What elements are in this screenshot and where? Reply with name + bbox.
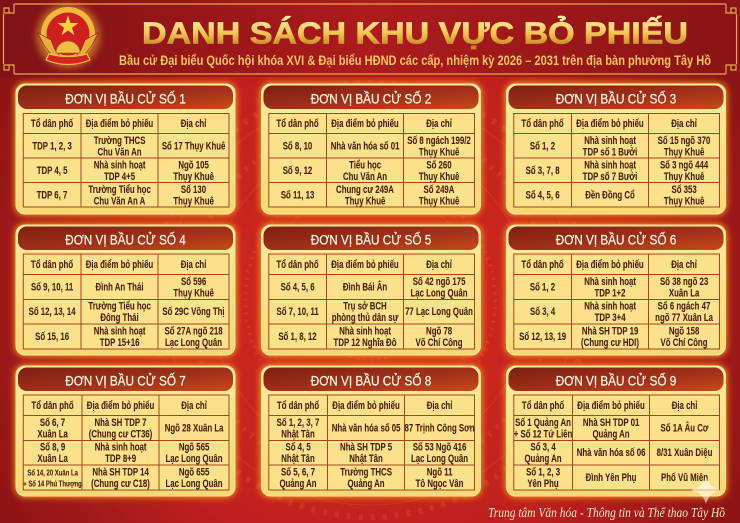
panel: đơn vị bầu cử số 1: TDP 4, 5: [37, 165, 68, 177]
panel: đơn vị bầu cử số 3: Số 3, 7, 8: [526, 165, 560, 177]
panel: đơn vị bầu cử số 9: [506, 365, 726, 497]
panel: đơn vị bầu cử số 2: Số 11, 13: [281, 189, 315, 202]
panel: đơn vị bầu cử số 9: Địa điểm bỏ phiếu: [577, 400, 645, 412]
panel: đơn vị bầu cử số 3: Thụy Khuê: [664, 171, 705, 183]
panel: đơn vị bầu cử số 7: Lạc Long Quân: [166, 453, 223, 465]
panel: đơn vị bầu cử số 1: Tổ dân phố: [31, 118, 73, 130]
panel: đơn vị bầu cử số 8: Quảng An: [279, 478, 317, 490]
icon: watermark sparkle: [691, 476, 721, 504]
panel: đơn vị bầu cử số 1: Chu Văn An: [97, 146, 142, 159]
panel: đơn vị bầu cử số 7: [15, 365, 236, 497]
panel: đơn vị bầu cử số 6: TDP 1+2: [595, 287, 625, 300]
panel: đơn vị bầu cử số 9: Số 1A Âu Cơ: [661, 421, 709, 435]
panel: đơn vị bầu cử số 6: Nhà sinh hoạt: [584, 300, 637, 313]
panel: đơn vị bầu cử số 7: Địa chỉ: [181, 400, 207, 412]
panel: đơn vị bầu cử số 7: Ngõ 28 Xuân La: [165, 422, 224, 435]
panel: đơn vị bầu cử số 5: Nhà sinh hoạt: [339, 325, 392, 338]
panel: đơn vị bầu cử số 4: Đông Thái: [100, 312, 139, 324]
panel: đơn vị bầu cử số 7: Số 6, 7: [40, 417, 65, 429]
panel: đơn vị bầu cử số 8: Nhà SH TDP 5: [340, 441, 393, 454]
panel: đơn vị bầu cử số 4: Số 15, 16: [35, 331, 70, 343]
panel: đơn vị bầu cử số 3: Thụy Khuê: [664, 146, 705, 159]
title: DANH SÁCH KHU VỰC BỎ PHIẾU: [142, 14, 688, 50]
panel: đơn vị bầu cử số 1: Địa chỉ: [181, 118, 207, 130]
panel: đơn vị bầu cử số 1: Địa điểm bỏ phiếu: [86, 118, 153, 130]
panel: đơn vị bầu cử số 3: Số 1, 2: [530, 140, 555, 153]
panel: đơn vị bầu cử số 6: Địa điểm bỏ phiếu: [576, 259, 644, 271]
panel: đơn vị bầu cử số 6: (Chung cư HDI): [581, 337, 639, 349]
panel: đơn vị bầu cử số 5: Đình Bái Ân: [343, 280, 387, 294]
decorative frame with corner frets: [4, 4, 736, 74]
panel: đơn vị bầu cử số 7: Ngõ 565: [179, 441, 210, 454]
panel: đơn vị bầu cử số 1: Thụy Khuê: [173, 171, 214, 183]
panel: đơn vị bầu cử số 3: Số 15 ngõ 370: [658, 135, 710, 147]
panel: đơn vị bầu cử số 2: Số 249A: [424, 184, 454, 196]
panel: đơn vị bầu cử số 7: Tổ dân phố: [31, 400, 74, 412]
panel: đơn vị bầu cử số 5: Số 7, 10, 11: [276, 306, 319, 318]
panel: đơn vị bầu cử số 2: Số 8 ngách 199/2: [407, 135, 471, 147]
panel: đơn vị bầu cử số 9: Phố Vũ Miên: [661, 472, 708, 484]
panel: đơn vị bầu cử số 3: Địa chỉ: [671, 118, 697, 130]
panel: đơn vị bầu cử số 1: Ngõ 105: [178, 159, 209, 172]
panel: đơn vị bầu cử số 4: ĐƠN VỊ BẦU CỬ SỐ 4: [65, 232, 186, 248]
panel: đơn vị bầu cử số 4: TDP 15+16: [100, 337, 140, 349]
panel: đơn vị bầu cử số 6: Nhà sinh hoạt: [584, 276, 637, 288]
panel: đơn vị bầu cử số 3: Số 3 ngõ 444: [660, 159, 709, 172]
panel: đơn vị bầu cử số 1: [15, 83, 236, 215]
panel: đơn vị bầu cử số 9: Địa chỉ: [672, 400, 698, 412]
panel: đơn vị bầu cử số 7: Xuân La: [37, 428, 68, 441]
panel: đơn vị bầu cử số 1: TDP 4+5: [104, 171, 136, 183]
panel: đơn vị bầu cử số 6: [506, 224, 726, 356]
panel: đơn vị bầu cử số 9: Tổ dân phố: [522, 400, 564, 412]
panel: đơn vị bầu cử số 9: Số 3, 4: [530, 441, 556, 454]
panel: đơn vị bầu cử số 7: TDP 8+9: [105, 453, 137, 465]
panel: đơn vị bầu cử số 5: 77 Lạc Long Quân: [405, 306, 473, 318]
panel: đơn vị bầu cử số 8: Lạc Long Quân: [411, 453, 468, 465]
panel: đơn vị bầu cử số 1: TDP 1, 2, 3: [32, 140, 72, 153]
panel: đơn vị bầu cử số 4: Nhà sinh hoạt: [94, 325, 146, 338]
panel: đơn vị bầu cử số 5: Lạc Long Quân: [411, 287, 468, 300]
panel: đơn vị bầu cử số 8: Số 4, 5: [285, 441, 311, 454]
panel: đơn vị bầu cử số 9: Đình Yên Phụ: [586, 472, 636, 484]
panel: đơn vị bầu cử số 2: Địa chỉ: [426, 118, 452, 130]
panel: đơn vị bầu cử số 8: Nhà văn hóa số 05: [332, 422, 401, 435]
panel: đơn vị bầu cử số 7: Địa điểm bỏ phiếu: [87, 400, 154, 412]
panel: đơn vị bầu cử số 2: Thụy Khuê: [419, 195, 460, 208]
panel: đơn vị bầu cử số 8: Quảng An: [347, 478, 385, 490]
panel: đơn vị bầu cử số 8: Số 53 Ngõ 416: [413, 441, 467, 454]
panel: đơn vị bầu cử số 5: Số 1, 8, 12: [278, 331, 317, 343]
panel: đơn vị bầu cử số 5: Số 42 ngõ 175: [413, 276, 466, 288]
panel: đơn vị bầu cử số 3: Nhà sinh hoạt: [584, 135, 637, 147]
panel: đơn vị bầu cử số 5: Tổ dân phố: [276, 259, 319, 271]
panel: đơn vị bầu cử số 2: Chu Văn An: [343, 171, 387, 183]
panel: đơn vị bầu cử số 9: ĐƠN VỊ BẦU CỬ SỐ 9: [556, 373, 676, 389]
panel: đơn vị bầu cử số 5: [260, 224, 482, 356]
panel: đơn vị bầu cử số 4: Số 27A ngõ 218: [165, 325, 223, 338]
panel: đơn vị bầu cử số 8: ĐƠN VỊ BẦU CỬ SỐ 8: [311, 373, 431, 389]
panel: đơn vị bầu cử số 4: Số 29C Võng Thị: [162, 306, 225, 318]
panel: đơn vị bầu cử số 3: Số 353: [671, 184, 697, 196]
panel: đơn vị bầu cử số 1: ĐƠN VỊ BẦU CỬ SỐ 1: [65, 91, 186, 107]
panel: đơn vị bầu cử số 9: Quảng An: [592, 428, 630, 441]
panel: đơn vị bầu cử số 1: Thụy Khuê: [173, 195, 214, 208]
panel: đơn vị bầu cử số 5: Ngõ 78: [426, 325, 453, 338]
panel: đơn vị bầu cử số 4: Lạc Long Quân: [165, 337, 222, 349]
panel: đơn vị bầu cử số 6: ĐƠN VỊ BẦU CỬ SỐ 6: [556, 232, 676, 248]
panel: đơn vị bầu cử số 1: TDP 6, 7: [37, 189, 67, 202]
panel: đơn vị bầu cử số 3: Nhà sinh hoạt: [584, 159, 637, 172]
panel: đơn vị bầu cử số 5: Địa điểm bỏ phiếu: [331, 259, 399, 271]
panel: đơn vị bầu cử số 3: Tổ dân phố: [521, 118, 564, 130]
panel: đơn vị bầu cử số 6: ngõ 77 Xuân La: [655, 312, 714, 324]
panel: đơn vị bầu cử số 8: Tô Ngọc Vân: [416, 478, 464, 490]
panel: đơn vị bầu cử số 8: Địa chỉ: [427, 400, 453, 412]
panel: đơn vị bầu cử số 3: TDP số 7 Bưởi: [583, 171, 637, 183]
panel: đơn vị bầu cử số 7: + Số 14 Phú Thượng: [23, 478, 82, 489]
panel: đơn vị bầu cử số 2: Số 260: [426, 159, 452, 172]
header band: [0, 0, 740, 77]
panel: đơn vị bầu cử số 4: Số 9, 10, 11: [31, 281, 74, 294]
panel: đơn vị bầu cử số 7: Nhà SH TDP 14: [92, 466, 149, 479]
panel: đơn vị bầu cử số 7: Số 8, 9: [40, 441, 66, 454]
panel: đơn vị bầu cử số 3: ĐƠN VỊ BẦU CỬ SỐ 3: [556, 91, 676, 107]
panel: đơn vị bầu cử số 3: Thụy Khuê: [664, 195, 705, 208]
panel: đơn vị bầu cử số 5: Võ Chí Công: [416, 337, 463, 349]
panel: đơn vị bầu cử số 1: Nhà sinh hoạt: [94, 159, 146, 172]
panel: đơn vị bầu cử số 5: Địa chỉ: [426, 259, 452, 271]
panel: đơn vị bầu cử số 2: Thụy Khuê: [419, 146, 460, 159]
panel: đơn vị bầu cử số 2: Tổ dân phố: [276, 118, 319, 130]
panel: đơn vị bầu cử số 2: ĐƠN VỊ BẦU CỬ SỐ 2: [311, 91, 431, 107]
panel: đơn vị bầu cử số 1: Trường THCS: [94, 135, 146, 147]
panel: đơn vị bầu cử số 3: Đền Đồng Cổ: [585, 189, 635, 202]
panel: đơn vị bầu cử số 8: Số 5, 6, 7: [281, 466, 315, 479]
panel: đơn vị bầu cử số 6: Xuân La: [669, 287, 700, 300]
panel: đơn vị bầu cử số 6: Ngõ 158: [669, 325, 700, 338]
panel: đơn vị bầu cử số 7: Nhà sinh hoạt: [95, 441, 147, 454]
panel: đơn vị bầu cử số 6: Võ Chí Công: [661, 337, 708, 349]
panel: đơn vị bầu cử số 5: TDP 12 Nghĩa Đô: [334, 337, 397, 349]
panel: đơn vị bầu cử số 3: Địa điểm bỏ phiếu: [576, 118, 644, 130]
panel: đơn vị bầu cử số 8: Tổ dân phố: [277, 400, 319, 412]
panel: đơn vị bầu cử số 8: Nhật Tân: [349, 453, 383, 465]
panel: đơn vị bầu cử số 7: (Chung cư CT36): [89, 428, 152, 441]
panel: đơn vị bầu cử số 6: Số 38 ngõ 23: [660, 276, 709, 288]
panel: đơn vị bầu cử số 5: ĐƠN VỊ BẦU CỬ SỐ 5: [311, 232, 431, 248]
panel: đơn vị bầu cử số 4: [15, 224, 236, 356]
panel: đơn vị bầu cử số 2: Nhà văn hóa số 01: [331, 140, 400, 153]
panel: đơn vị bầu cử số 6: Số 6 ngách 47: [658, 300, 710, 313]
icon: national emblem: [36, 4, 100, 68]
panel: đơn vị bầu cử số 1: Số 130: [181, 184, 206, 196]
panel: đơn vị bầu cử số 7: Xuân La: [37, 453, 68, 465]
panel: đơn vị bầu cử số 2: Thụy Khuê: [419, 171, 460, 183]
panel: đơn vị bầu cử số 4: Trường Tiểu học: [88, 300, 151, 313]
panel: đơn vị bầu cử số 1: Số 17 Thụy Khuê: [162, 140, 226, 153]
panel: đơn vị bầu cử số 1: Trường Tiểu học: [88, 184, 151, 196]
panel: đơn vị bầu cử số 6: Nhà SH TDP 19: [582, 325, 639, 338]
panel: đơn vị bầu cử số 2: [260, 83, 482, 215]
panel: đơn vị bầu cử số 8: Nhật Tân: [281, 453, 315, 465]
panel: đơn vị bầu cử số 7: Nhà SH TDP 7: [94, 417, 147, 429]
panel: đơn vị bầu cử số 4: Tổ dân phố: [31, 259, 73, 271]
panel: đơn vị bầu cử số 2: Địa điểm bỏ phiếu: [331, 118, 399, 130]
panel: đơn vị bầu cử số 4: Địa điểm bỏ phiếu: [86, 259, 153, 271]
panel: đơn vị bầu cử số 8: 87 Trịnh Công Sơn: [405, 422, 475, 435]
panel: đơn vị bầu cử số 6: Địa chỉ: [671, 259, 697, 271]
panel: đơn vị bầu cử số 8: Số 1, 2, 3, 7: [277, 417, 319, 429]
panel: đơn vị bầu cử số 7: (Chung cư C18): [91, 478, 150, 490]
panel: đơn vị bầu cử số 3: Số 4, 5, 6: [526, 189, 560, 202]
panel: đơn vị bầu cử số 9: Số 1 Quảng An: [515, 417, 571, 429]
panel: đơn vị bầu cử số 5: Số 4, 5, 6: [281, 281, 315, 294]
panel: đơn vị bầu cử số 9: + Số 12 Tứ Liên: [514, 428, 572, 441]
panel: đơn vị bầu cử số 7: Số 14, 20 Xuân La: [27, 467, 79, 478]
panel: đơn vị bầu cử số 5: phòng thủ dân sự: [332, 312, 398, 324]
panel: đơn vị bầu cử số 3: TDP số 1 Bưởi: [583, 146, 637, 159]
panel: đơn vị bầu cử số 2: Số 8, 10: [283, 140, 312, 153]
panel: đơn vị bầu cử số 6: Số 12, 13, 19: [519, 331, 567, 343]
panel: đơn vị bầu cử số 7: Ngõ 655: [179, 466, 210, 479]
panel: đơn vị bầu cử số 4: Thụy Khuê: [173, 287, 214, 300]
panel: đơn vị bầu cử số 8: Trường THCS: [340, 466, 392, 479]
panel: đơn vị bầu cử số 9: Nhà văn hóa số 06: [577, 447, 646, 459]
panel: đơn vị bầu cử số 1: Chu Văn An A: [94, 195, 145, 208]
panel: đơn vị bầu cử số 6: Số 1, 2: [530, 281, 555, 294]
panel: đơn vị bầu cử số 9: Yên Phụ: [527, 478, 559, 490]
panel: đơn vị bầu cử số 7: Lạc Long Quân: [166, 478, 223, 490]
panel: đơn vị bầu cử số 6: TDP 3+4: [595, 312, 626, 324]
panel: đơn vị bầu cử số 8: Địa điểm bỏ phiếu: [332, 400, 400, 412]
panel: đơn vị bầu cử số 5: Trụ sở BCH: [343, 300, 387, 313]
panel: đơn vị bầu cử số 8: [260, 365, 482, 497]
panel: đơn vị bầu cử số 8: Nhật Tân: [281, 428, 315, 441]
panel: đơn vị bầu cử số 4: Số 12, 13, 14: [29, 306, 76, 318]
panel: đơn vị bầu cử số 9: 8/31 Xuân Diệu: [657, 447, 712, 459]
panel: đơn vị bầu cử số 3: [506, 83, 726, 215]
panel: đơn vị bầu cử số 2: Số 9, 12: [283, 165, 312, 177]
panel: đơn vị bầu cử số 8: Ngõ 11: [427, 466, 453, 479]
panel: đơn vị bầu cử số 6: Số 3, 4: [530, 306, 556, 318]
panel: đơn vị bầu cử số 9: Quảng An: [524, 453, 562, 465]
panel: đơn vị bầu cử số 4: Địa chỉ: [181, 259, 207, 271]
panel: đơn vị bầu cử số 2: Chung cư 249A: [336, 184, 394, 196]
panel: đơn vị bầu cử số 2: Thụy Khuê: [345, 195, 386, 208]
panel: đơn vị bầu cử số 2: Tiểu học: [349, 159, 382, 172]
panel: đơn vị bầu cử số 7: ĐƠN VỊ BẦU CỬ SỐ 7: [65, 373, 186, 389]
panel: đơn vị bầu cử số 4: Số 596: [181, 276, 207, 288]
panel: đơn vị bầu cử số 6: Tổ dân phố: [521, 259, 564, 271]
panel: đơn vị bầu cử số 4: Đình An Thái: [95, 281, 144, 294]
panel: đơn vị bầu cử số 9: Số 1, 2, 3: [526, 466, 561, 479]
panel: đơn vị bầu cử số 9: Nhà SH TDP 01: [583, 417, 640, 429]
